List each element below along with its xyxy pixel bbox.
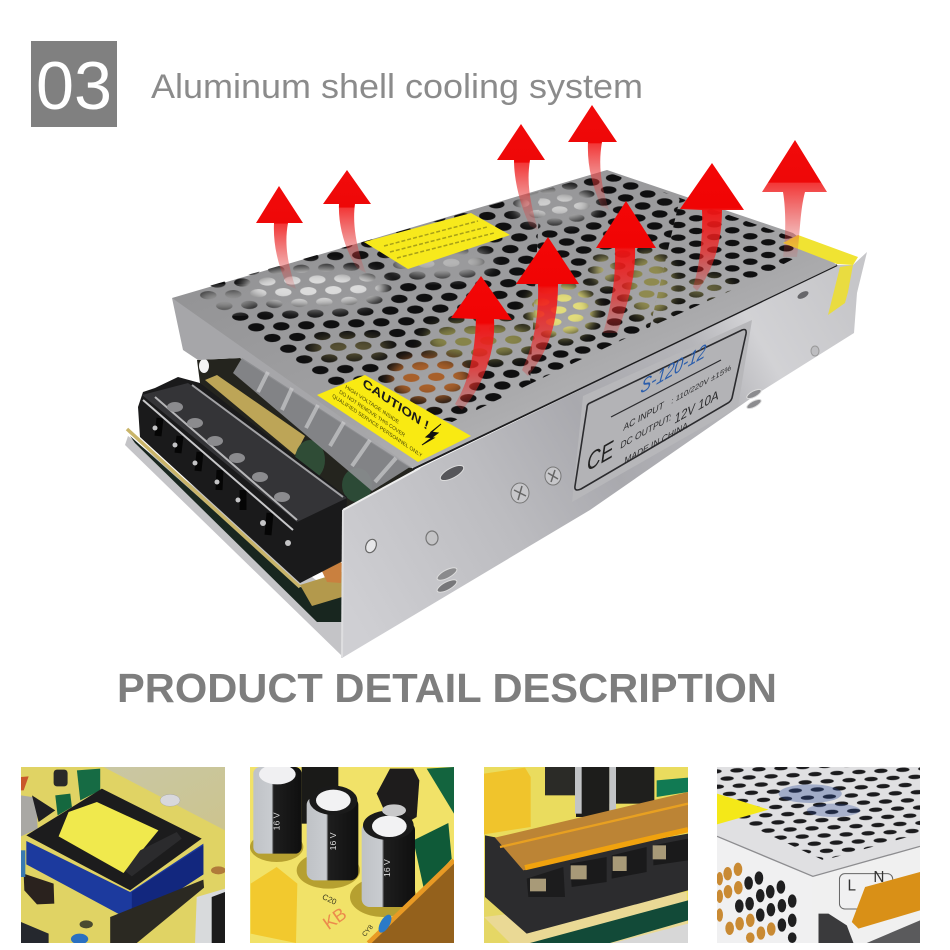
product: power supply unit xyxy=(125,105,867,658)
photo: capacitors: KB xyxy=(319,903,350,934)
photo: capacitors: CY8 xyxy=(361,924,375,938)
photo: shell corner close-up xyxy=(717,767,920,943)
sticker: caution: DO NOT REMOVE THIS COVER xyxy=(338,389,406,439)
sticker: caution: CAUTION ! xyxy=(361,376,431,433)
arrow 1 xyxy=(256,186,303,289)
label plate S-120-12: S-120-12 xyxy=(639,340,707,399)
label plate S-120-12: MADE IN CHINA xyxy=(624,420,689,467)
arrow 9 xyxy=(451,276,512,410)
photo: capacitors: C20 xyxy=(321,892,338,907)
arrow 3 xyxy=(497,124,545,230)
arrow 7 xyxy=(596,201,656,333)
sticker: right side xyxy=(828,265,853,315)
arrow 4 xyxy=(568,105,617,210)
number badge 03: 03 xyxy=(36,48,112,124)
perforated top plate xyxy=(150,150,858,468)
side panel of the shell xyxy=(342,252,867,658)
front lip of the shell xyxy=(172,298,420,468)
photo: terminal block with amber cover xyxy=(484,767,688,943)
sticker: caution xyxy=(317,375,471,462)
black terminal block xyxy=(138,377,347,583)
label plate S-120-12: AC INPUT xyxy=(623,400,665,434)
label plate S-120-12 xyxy=(572,320,752,502)
photo: capacitors: 16 V xyxy=(382,859,392,877)
photo: capacitors: 16 V xyxy=(328,832,338,850)
interior seen through the holes xyxy=(200,174,794,422)
photo: capacitors xyxy=(250,767,454,943)
label plate S-120-12: CE xyxy=(585,433,616,478)
sticker: right corner xyxy=(783,235,858,265)
arrow 2 xyxy=(323,170,371,273)
interior behind the terminals xyxy=(197,358,415,583)
sticker: caution: QUALIFIED SERVICE PERSONNEL ONLY xyxy=(331,393,423,460)
photo: shell corner close-up: L xyxy=(847,877,856,894)
label plate S-120-12: 12V 10A xyxy=(674,386,720,427)
sticker: warranty xyxy=(364,213,510,269)
base plate xyxy=(125,436,342,656)
mounting holes and screws xyxy=(364,290,819,595)
photo: shell corner close-up: N xyxy=(873,869,884,886)
label plate S-120-12: : 110/220V ±15% xyxy=(671,363,732,406)
arrow 6 xyxy=(680,163,744,291)
heading: aluminum shell cooling system: Aluminum shell cooling system xyxy=(151,68,643,106)
sticker: caution: HIGH VOLTAGE INSIDE xyxy=(344,384,400,426)
arrow 5 xyxy=(762,140,827,257)
circuit board edge xyxy=(127,429,342,622)
label plate S-120-12: DC OUTPUT: xyxy=(620,412,672,452)
arrow 8 xyxy=(516,237,579,376)
photo: capacitors: 16 V xyxy=(271,812,281,830)
clear back cover strip xyxy=(233,358,410,491)
photo: transformer xyxy=(21,767,225,943)
heading: product detail description: PRODUCT DETAIL DESCRIPTION xyxy=(117,665,777,711)
